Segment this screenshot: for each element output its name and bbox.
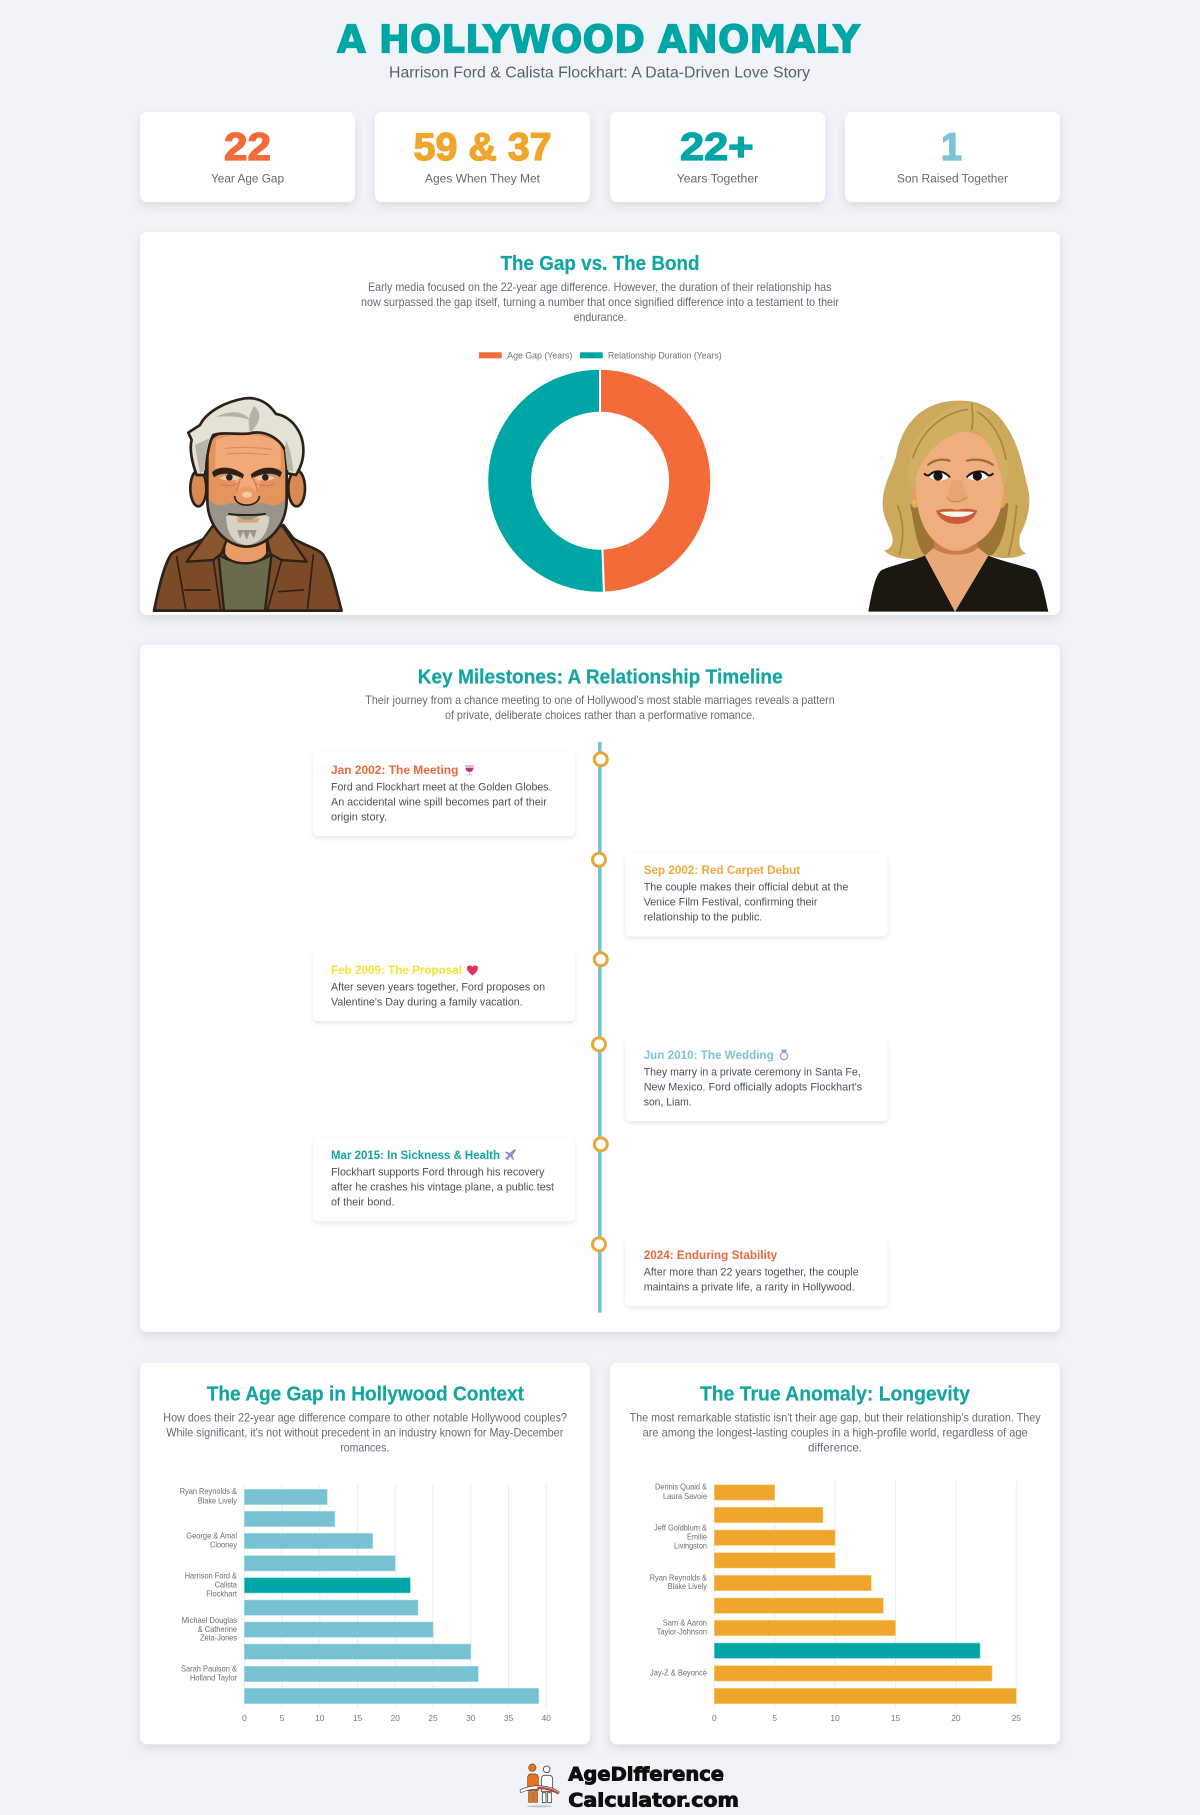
timeline axis bbox=[598, 742, 602, 1313]
milestone: Jun 2010: son, Liam. bbox=[644, 1096, 692, 1108]
bar chart: relationship length: Sam & Aaron bbox=[663, 1617, 707, 1627]
logo text: Calculator.com bbox=[568, 1790, 739, 1812]
icon: ring bbox=[780, 1050, 788, 1060]
bar chart: age gaps: 15 bbox=[353, 1713, 362, 1723]
bar chart: age gaps: George & Amal bbox=[186, 1531, 237, 1541]
heading: gap vs bond: The Gap vs. The Bond bbox=[500, 253, 700, 275]
panel: the gap vs the bond bbox=[140, 232, 1060, 615]
milestone: Mar 2015: of their bond. bbox=[331, 1196, 394, 1208]
bar chart: age gaps: & Catherine bbox=[198, 1624, 237, 1634]
milestone: Jun 2010: Jun 2010: The Wedding bbox=[644, 1048, 774, 1062]
description: age gap context: romances. bbox=[340, 1440, 389, 1454]
bar chart: age gaps: Blake Lively bbox=[198, 1496, 238, 1506]
milestone: Mar 2015 bbox=[313, 1138, 575, 1221]
portrait: Harrison Ford bbox=[154, 398, 342, 611]
panel: the true anomaly longevity bbox=[610, 1363, 1060, 1744]
milestone: Mar 2015: Mar 2015: In Sickness & Health bbox=[331, 1148, 500, 1162]
milestone: Jun 2010 bbox=[626, 1038, 888, 1121]
milestone: Jan 2002: origin story. bbox=[331, 812, 387, 824]
stat card: age gap bbox=[140, 112, 355, 202]
bar chart: relationship length: 15 bbox=[891, 1713, 900, 1723]
bar chart: age gaps: 10 bbox=[315, 1713, 325, 1723]
icon: wine glass bbox=[465, 765, 474, 776]
portrait: Calista Flockhart bbox=[868, 401, 1048, 612]
milestone: Feb 2009: Feb 2009: The Proposal bbox=[331, 963, 462, 977]
milestone: 2024 bbox=[626, 1238, 888, 1306]
bar chart: age gaps: Sarah Paulson & bbox=[181, 1664, 237, 1674]
bar chart: age gaps: 20 bbox=[391, 1713, 400, 1723]
description: age gap context bbox=[163, 1410, 567, 1454]
milestone: Jan 2002 bbox=[313, 752, 575, 836]
icon: heart bbox=[467, 966, 478, 976]
milestone: Jun 2010: New Mexico. Ford officially adopts Flockhart's bbox=[644, 1082, 862, 1094]
bar chart: age gaps: Ryan Reynolds & bbox=[180, 1486, 237, 1496]
icon: two figures bbox=[520, 1764, 559, 1807]
stat card: age gap: Year Age Gap bbox=[211, 172, 284, 186]
bar chart: relationship length: Laura Savoie bbox=[663, 1491, 707, 1501]
milestone: 2024: After more than 22 years together, the couple bbox=[644, 1266, 859, 1278]
milestone: Sep 2002: The couple makes their official debut at the bbox=[644, 882, 848, 894]
chart legend bbox=[479, 349, 722, 360]
bar chart: age gaps: Zeta-Jones bbox=[200, 1633, 237, 1643]
logo text bbox=[568, 1764, 739, 1812]
bar chart: relationship length: Jeff Goldblum & bbox=[654, 1522, 707, 1532]
heading: age gap context: The Age Gap in Hollywood Context bbox=[207, 1384, 524, 1406]
bar chart: age gaps: 25 bbox=[428, 1713, 438, 1723]
stat card: son raised together: 1 bbox=[941, 126, 962, 169]
bar chart: age gaps: 0 bbox=[242, 1713, 247, 1723]
bar chart: age gaps bbox=[180, 1485, 551, 1723]
bar chart: age gaps: Harrison Ford & bbox=[185, 1571, 237, 1581]
milestone: Jan 2002: Ford and Flockhart meet at the Golden Globes. bbox=[331, 782, 551, 794]
milestone: Sep 2002 bbox=[626, 852, 888, 936]
bar chart: relationship length: Dennis Quaid & bbox=[655, 1482, 707, 1492]
bar chart: relationship length: 5 bbox=[772, 1713, 777, 1723]
milestone: Feb 2009 bbox=[313, 952, 575, 1021]
description: longevity: are among the longest-lasting couples in a high-profile world, regardless of age bbox=[643, 1425, 1028, 1439]
stat card: son raised together bbox=[845, 112, 1060, 202]
bar chart: age gaps: 30 bbox=[466, 1713, 476, 1723]
stat card: ages when they met: Ages When They Met bbox=[425, 172, 541, 186]
stat card: ages when they met: 59 & 37 bbox=[414, 126, 552, 169]
milestone: Sep 2002: Venice Film Festival, confirming their bbox=[644, 896, 818, 908]
milestone: 2024: maintains a private life, a rarity in Hollywood. bbox=[644, 1282, 855, 1294]
bar chart: age gaps: Calista bbox=[215, 1580, 237, 1590]
bar chart: relationship length bbox=[650, 1481, 1021, 1723]
description: age gap context: While significant, it's not without precedent in an industry known for May-December bbox=[166, 1425, 563, 1439]
milestone: Jun 2010: They marry in a private ceremony in Santa Fe, bbox=[644, 1066, 861, 1078]
icon: airplane bbox=[505, 1149, 516, 1160]
bar chart: relationship length: Ryan Reynolds & bbox=[650, 1572, 707, 1582]
chart legend: Age Gap (Years) bbox=[507, 349, 572, 360]
description: gap vs bond: Early media focused on the 22-year age difference. However, the duration of their relationship has bbox=[368, 280, 832, 294]
bar chart: relationship length: 20 bbox=[951, 1713, 961, 1723]
milestone: Sep 2002: Sep 2002: Red Carpet Debut bbox=[644, 863, 800, 877]
stat card: son raised together: Son Raised Together bbox=[897, 172, 1008, 186]
bar chart: relationship length: Livingston bbox=[674, 1541, 707, 1551]
bar chart: age gaps: Flockhart bbox=[206, 1589, 238, 1599]
milestone: Feb 2009: After seven years together, Ford proposes on bbox=[331, 982, 545, 994]
footer logo bbox=[520, 1764, 739, 1812]
bar chart: age gaps: 5 bbox=[280, 1713, 285, 1723]
bar chart: relationship length: Jay-Z & Beyoncé bbox=[650, 1667, 707, 1677]
bar chart: age gaps: 35 bbox=[504, 1713, 514, 1723]
bar chart: relationship length: Taylor-Johnson bbox=[657, 1627, 707, 1637]
description: longevity bbox=[630, 1410, 1041, 1454]
milestone: Sep 2002: relationship to the public. bbox=[644, 912, 762, 924]
bar chart: age gaps: 40 bbox=[542, 1713, 551, 1723]
bar chart: age gaps: Holland Taylor bbox=[190, 1673, 237, 1683]
logo text: AgeDifference bbox=[568, 1764, 724, 1786]
stat card: age gap: 22 bbox=[224, 126, 271, 169]
heading: key milestones: Key Milestones: A Relationship Timeline bbox=[418, 666, 783, 688]
title: A HOLLYWOOD ANOMALY bbox=[337, 18, 860, 62]
bar chart: relationship length: Blake Lively bbox=[668, 1581, 708, 1591]
bar chart: relationship length: Emilie bbox=[687, 1532, 707, 1542]
description: age gap context: How does their 22-year age difference compare to other notable Hollywood couples? bbox=[163, 1410, 567, 1424]
milestone: Jan 2002: An accidental wine spill becomes part of their bbox=[331, 796, 547, 808]
stat card: ages when they met bbox=[375, 112, 590, 202]
description: gap vs bond: now surpassed the gap itself, turning a number that once signified difference into a testament to their bbox=[361, 295, 839, 309]
description: key milestones bbox=[365, 693, 835, 722]
description: longevity: difference. bbox=[808, 1440, 862, 1454]
bar chart: relationship length: 10 bbox=[830, 1713, 840, 1723]
stat card: years together: Years Together bbox=[677, 172, 758, 186]
bar chart: age gaps: Clooney bbox=[210, 1540, 238, 1550]
subtitle: Harrison Ford & Calista Flockhart: A Data-Driven Love Story bbox=[389, 64, 810, 82]
description: gap vs bond: endurance. bbox=[574, 310, 627, 324]
milestone: Mar 2015: after he crashes his vintage plane, a public test bbox=[331, 1182, 555, 1194]
milestone: Feb 2009: Valentine's Day during a family vacation. bbox=[331, 996, 523, 1008]
description: longevity: The most remarkable statistic isn't their age gap, but their relationship's duration. They bbox=[630, 1410, 1041, 1424]
bar chart: age gaps: Michael Douglas bbox=[182, 1615, 237, 1625]
description: key milestones: of private, deliberate choices rather than a performative romance. bbox=[445, 708, 755, 722]
milestone: 2024: 2024: Enduring Stability bbox=[644, 1248, 777, 1262]
donut chart bbox=[487, 369, 711, 593]
stat card: years together bbox=[610, 112, 825, 202]
panel: key milestones timeline bbox=[140, 645, 1060, 1332]
milestone: Jan 2002: Jan 2002: The Meeting bbox=[331, 763, 458, 777]
heading: longevity: The True Anomaly: Longevity bbox=[700, 1384, 971, 1406]
panel: age gap in Hollywood context bbox=[140, 1363, 590, 1744]
bar chart: relationship length: 25 bbox=[1012, 1713, 1021, 1723]
stat card: years together: 22+ bbox=[680, 126, 754, 169]
milestone: Mar 2015: Flockhart supports Ford through his recovery bbox=[331, 1166, 545, 1178]
chart legend: Relationship Duration (Years) bbox=[608, 349, 722, 360]
timeline markers bbox=[592, 753, 607, 1251]
description: key milestones: Their journey from a chance meeting to one of Hollywood's most stable marriages reveals a pattern bbox=[365, 693, 835, 707]
bar chart: relationship length: 0 bbox=[712, 1713, 717, 1723]
description: gap vs bond bbox=[361, 280, 839, 324]
